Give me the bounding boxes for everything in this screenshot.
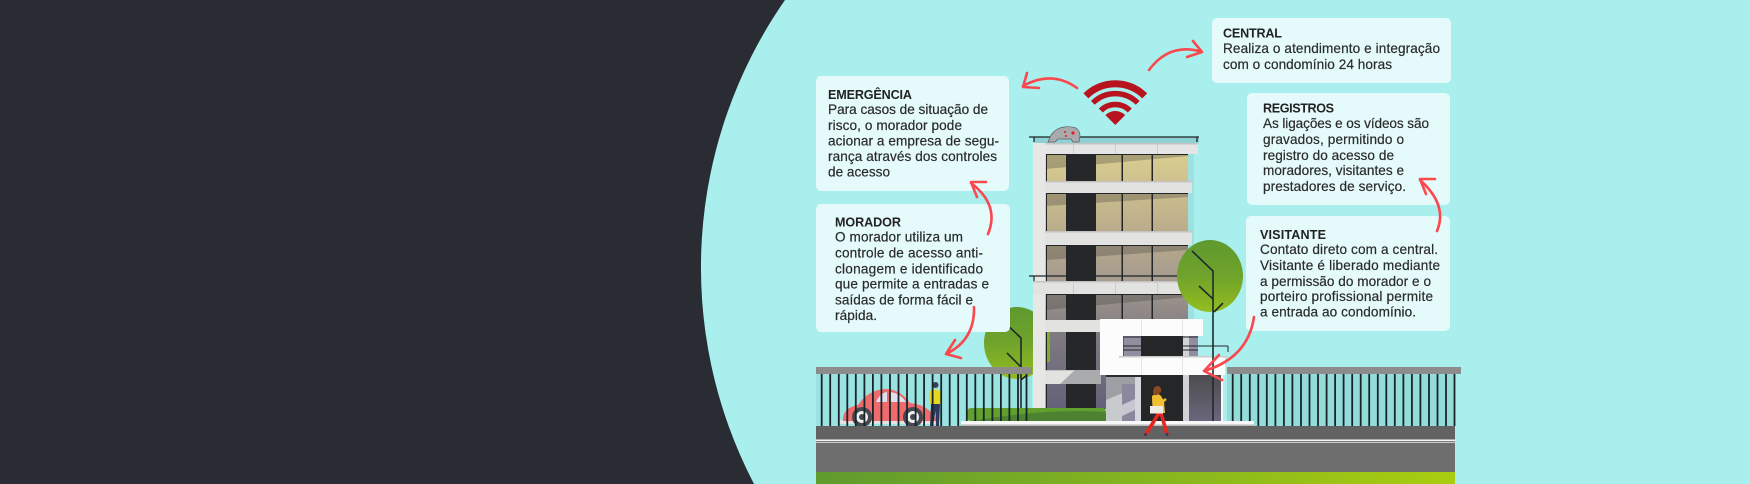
building: main tower [1029,137,1199,409]
fence back panels [816,374,1455,426]
mid rail [1029,276,1188,281]
text block: morador: controle de acesso anti- [835,246,983,260]
text block: visitante: Contato direto com a central. [1260,242,1438,257]
text block: morador: rápida. [835,308,877,323]
text block: registros [1263,116,1429,194]
text block: visitante: a permissão do morador e o [1260,274,1431,289]
panel: registros [1247,93,1450,205]
mullions [1046,154,1188,409]
heading: morador: MORADOR [835,216,901,230]
green ground band [816,472,1455,484]
text block: registros: prestadores de serviço. [1263,179,1406,194]
tree seen through glass [1046,325,1050,362]
building: white front block [1100,319,1228,421]
heading: central: CENTRAL [1223,27,1282,41]
tree: left [984,307,1050,412]
car [840,389,940,427]
text block: registros: registro do acesso de [1263,148,1394,163]
road and sidewalk [816,421,1455,472]
hedge [967,408,1106,421]
heading: registros: REGISTROS [1263,102,1334,116]
text block: morador: O morador utiliza um [835,230,963,245]
ground floor [1106,375,1223,421]
text block: registros: As ligações e os vídeos são [1263,116,1429,131]
arrow: morador to fence [946,307,974,358]
text block: morador: clonagem e identificado [835,261,983,276]
arrow: visitante to registros [1420,179,1440,231]
text block: central: com o condomínio 24 horas [1223,57,1392,72]
text block: registros: moradores, visitantes e [1263,163,1404,178]
wifi icon [1086,84,1145,125]
white volume [1100,319,1225,375]
text block: emergencia: Para casos de situação de [828,102,988,117]
arrow: morador to emergencia [971,182,992,234]
panel: emergencia [816,76,1009,191]
text block: central: Realiza o atendimento e integração [1223,41,1440,56]
text block: central [1223,41,1440,72]
left wall [1033,143,1046,408]
fence: left [816,367,1032,426]
heading: emergencia: EMERGÊNCIA [828,87,912,102]
text block: visitante: Visitante é liberado mediante [1260,258,1440,273]
heading: visitante: VISITANTE [1260,228,1326,242]
text block: registros: gravados, permitindo o [1263,132,1404,147]
arrow: visitante to building [1204,317,1254,380]
person: man by the fence [929,382,942,426]
floor slabs [1033,181,1192,384]
person: woman walking [1144,386,1168,436]
text block: visitante: porteiro profissional permite [1260,289,1433,304]
upper window [1123,336,1198,357]
text block: morador: saídas de forma fácil e [835,292,973,308]
window shadows [1046,154,1188,310]
arrow: wifi to emergencia [1023,73,1077,88]
panel: central [1212,18,1451,83]
text block: emergencia: de acesso [828,164,890,180]
dark core column [1067,154,1096,409]
text block: emergencia: risco, o morador pode [828,118,962,133]
text block: morador: que permite a entradas e [835,277,989,292]
text block: visitante: a entrada ao condomínio. [1260,305,1416,320]
mascot: bulldog on roof [1048,127,1080,142]
fence: right [1227,367,1461,426]
panel: morador [816,204,1010,332]
arrow: wifi to central [1149,41,1202,70]
tree: right [1177,240,1243,422]
roof slab [1033,143,1198,154]
text block: emergencia: rança através dos controles [828,149,997,164]
text block: emergencia: acionar a empresa de segu- [828,134,999,148]
text block: visitante [1260,242,1440,320]
tower shadow [1188,154,1194,319]
text block: morador [835,230,989,323]
roof rail [1034,137,1199,143]
tower glass facade [1045,154,1188,409]
panel: visitante [1246,216,1450,331]
text block: emergencia [828,102,999,180]
